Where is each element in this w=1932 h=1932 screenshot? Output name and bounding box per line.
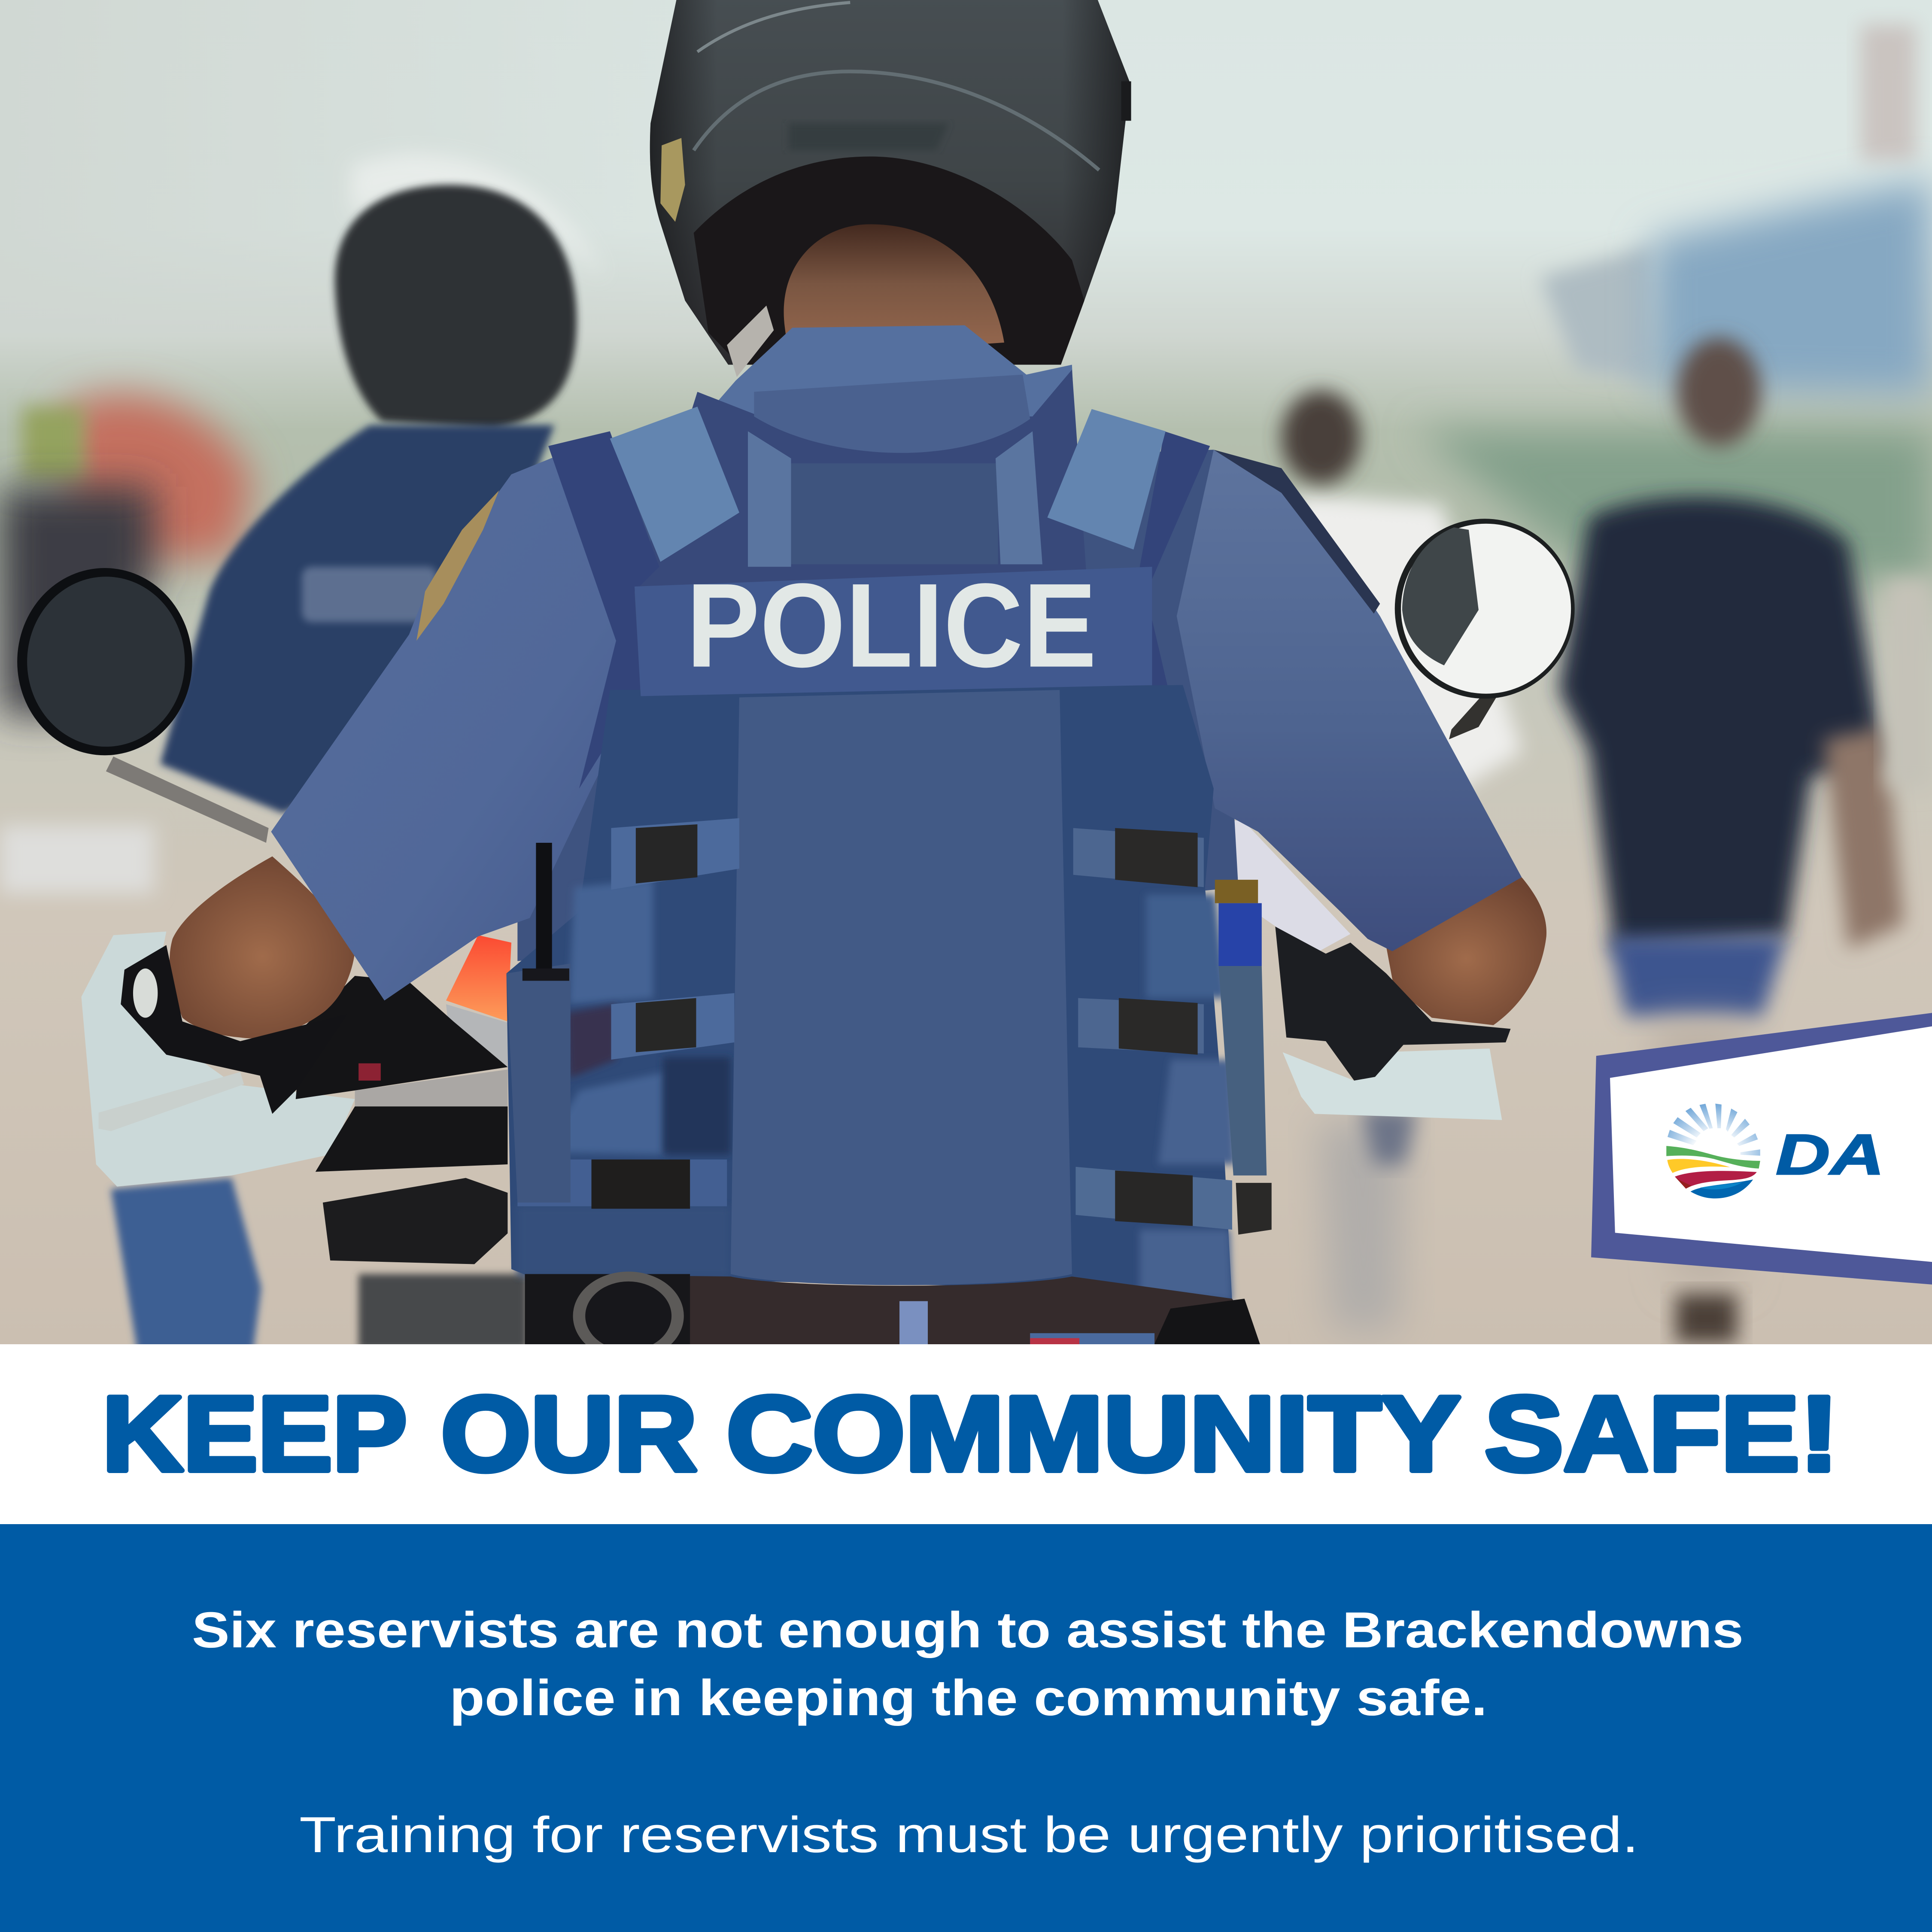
shirt sleeve right (1177, 450, 1522, 951)
title: KEEP (102, 1374, 407, 1493)
arms (170, 857, 1546, 1038)
right handlebar guard (1208, 820, 1350, 954)
shoulder badge (416, 490, 499, 641)
blurred street background (0, 0, 1932, 1344)
title: SAFE! (1485, 1374, 1839, 1493)
icon: DA sunrise emblem (1666, 1103, 1760, 1198)
shoulder pad right (1047, 409, 1166, 550)
vest lower right quilting (1140, 895, 1236, 1301)
title: OUR (441, 1374, 697, 1493)
background rider (111, 154, 604, 1355)
side pouch right (1215, 880, 1272, 1235)
left hand guard (81, 932, 355, 1187)
message line 1: Six reservists are not enough to assist the Brackendowns (192, 1602, 1744, 1659)
right mirror (1395, 519, 1575, 739)
vest straps dark (548, 431, 659, 789)
logo badge (1591, 1013, 1932, 1285)
helmet (650, 0, 1131, 377)
left mirror (17, 568, 269, 843)
vest centre panel (731, 690, 1072, 1285)
shoulder pad left (610, 407, 739, 562)
strap buckles left (517, 818, 739, 1209)
vest upper back (635, 370, 1087, 592)
motorcycle and rider foreground (17, 0, 1575, 1360)
right hand guard (1283, 1048, 1502, 1120)
duty belt (525, 1272, 1262, 1360)
vest body (507, 685, 1232, 1301)
blue message panel (0, 1524, 1932, 1932)
strap buckles right (1073, 828, 1232, 1230)
badge frame (1591, 1013, 1932, 1285)
chrome under tail light (446, 1004, 507, 1067)
photo: motorcycle police officer (0, 0, 1932, 1360)
shirt torso (517, 450, 1238, 961)
bike controls (296, 976, 527, 1349)
vest lower left quilting (517, 880, 731, 1276)
message line 2: police in keeping the community safe. (450, 1670, 1487, 1726)
neck (784, 224, 1004, 357)
brake lever (99, 1072, 244, 1131)
name plate (635, 567, 1152, 696)
collar (702, 325, 1075, 419)
gloves (121, 927, 1510, 1114)
side pouch left (507, 843, 571, 1203)
DA wordmark: DA (1776, 1123, 1885, 1187)
title band (0, 1344, 1932, 1524)
POLICE lettering: POLICE (687, 559, 1097, 692)
red tail light (446, 935, 511, 1021)
shirt sleeve left (271, 456, 641, 1000)
title: COMMUNITY (726, 1374, 1461, 1493)
call to action: Training for reservists must be urgently prioritised. (299, 1807, 1639, 1863)
sun rays (1668, 1103, 1760, 1156)
title (102, 1374, 1839, 1493)
badge white panel (1610, 1027, 1932, 1262)
